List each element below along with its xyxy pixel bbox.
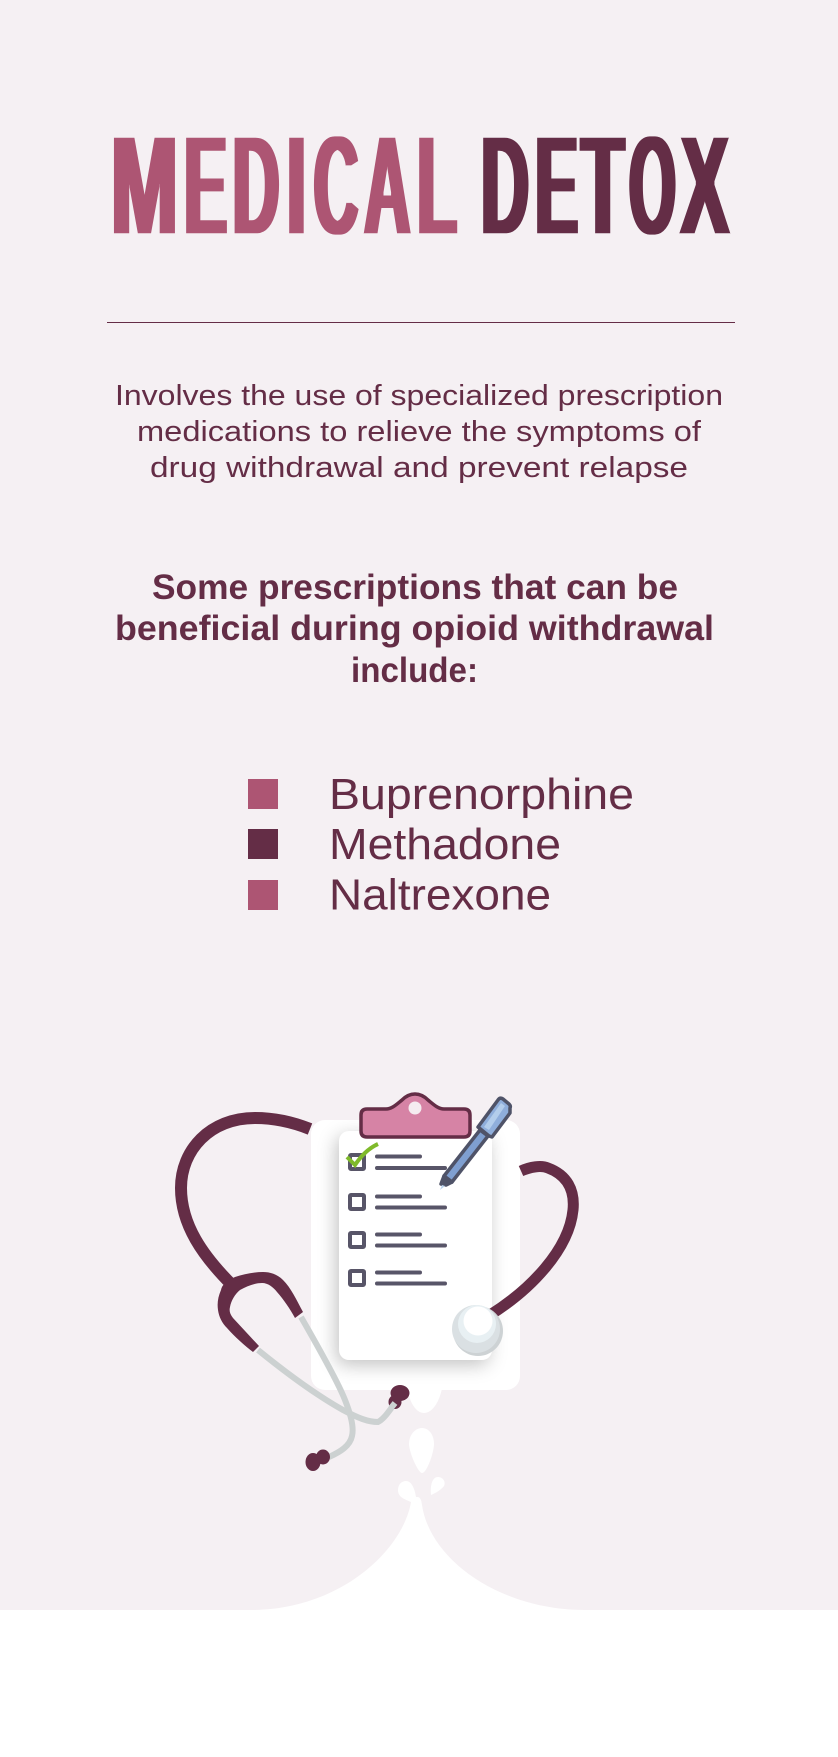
stethoscope right tube (490, 1167, 573, 1315)
green check mark (347, 1144, 378, 1165)
intro text (115, 380, 723, 484)
title: E (184, 107, 227, 266)
title: D (481, 107, 529, 266)
medication list (248, 770, 634, 920)
title (111, 107, 729, 266)
clipboard clip (361, 1094, 470, 1137)
title: M (111, 107, 178, 266)
pen (440, 1098, 510, 1190)
title: L (417, 107, 457, 266)
bullet: Buprenorphine (248, 779, 278, 809)
intro text: Involves the use of specialized prescription (115, 380, 723, 412)
ear tip lower (306, 1450, 330, 1471)
subheading: Some prescriptions that can be (152, 568, 678, 607)
stethoscope headset (218, 1272, 303, 1352)
intro text: drug withdrawal and prevent relapse (150, 452, 688, 484)
stethoscope left tube (181, 1118, 310, 1285)
checklist (350, 1155, 445, 1285)
ear tip upper (388, 1385, 410, 1409)
chest piece (452, 1305, 503, 1356)
label: Methadone: Methadone (329, 820, 561, 869)
title: C (314, 107, 358, 266)
bullet: Naltrexone (248, 880, 278, 910)
title: A (364, 107, 410, 266)
bullet: Methadone (248, 829, 278, 859)
title: D (233, 107, 279, 266)
title: I (287, 107, 306, 266)
gray ear tubes (258, 1317, 395, 1457)
title: X (680, 107, 729, 266)
subheading: beneficial during opioid withdrawal (115, 609, 714, 648)
label: Naltrexone: Naltrexone (329, 870, 551, 920)
clipboard board (311, 1120, 520, 1390)
illustration: clipboard and stethoscope (181, 1094, 573, 1471)
title: T (581, 107, 624, 266)
title: E (535, 107, 578, 266)
subheading: include: (351, 651, 478, 690)
intro text: medications to relieve the symptoms of (137, 416, 702, 448)
title: O (629, 107, 676, 266)
label: Buprenorphine: Buprenorphine (329, 770, 634, 819)
paper sheet (339, 1131, 492, 1360)
subheading (115, 568, 714, 690)
white splash at page bottom (0, 1388, 838, 1757)
